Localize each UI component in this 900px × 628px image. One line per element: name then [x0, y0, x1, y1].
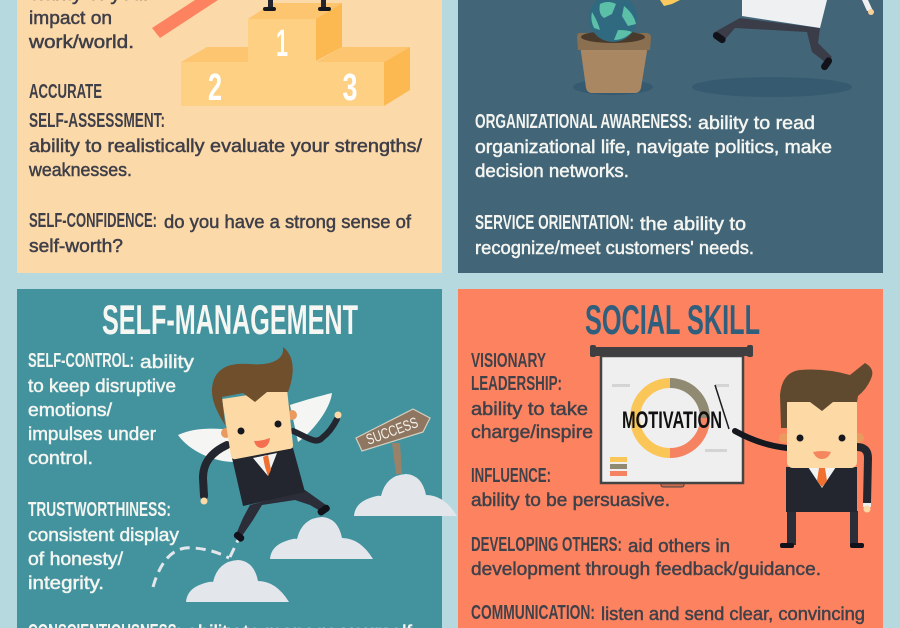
text: self-management items: integrity. — [28, 572, 104, 593]
text: self-awareness items: ability to realistically evaluate your strengths/ — [29, 135, 423, 156]
text: self-awareness items: work/world. — [28, 31, 134, 52]
text: social awareness items: decision networks. — [475, 160, 629, 181]
icon: presenting businessman — [715, 363, 872, 548]
icon: potted globe — [573, 0, 653, 95]
heading: social skill: SOCIAL SKILL — [585, 296, 760, 343]
text: social awareness items: recognize/meet customers' needs. — [475, 237, 754, 258]
text: self-awareness items: impact on — [29, 7, 112, 28]
text: self-management items: control. — [28, 447, 93, 468]
icon: dashed jump path — [153, 540, 238, 587]
chart: motivation donut — [635, 383, 705, 453]
icon: clouds — [186, 474, 457, 602]
text: social skill items: DEVELOPING OTHERS: — [471, 533, 622, 556]
panel: social awareness — [458, 0, 883, 273]
text: social awareness items: SERVICE ORIENTATION: — [475, 211, 634, 234]
chart labels — [612, 384, 729, 452]
text: self-management items: consistent display — [28, 524, 180, 545]
chart legend — [610, 457, 627, 476]
icon: character shadow — [692, 77, 852, 97]
icon: success signpost: SUCCESS — [364, 414, 420, 449]
text: social awareness items: the ability to — [640, 213, 746, 234]
text: self-management items: SELF-CONTROL: — [28, 349, 134, 372]
text: social skill items: VISIONARY — [471, 349, 546, 372]
text: self-awareness items: SELF-ASSESSMENT: — [29, 109, 165, 132]
text: self-awareness items: SELF-CONFIDENCE: — [29, 209, 157, 232]
text: social awareness items: ability to read — [698, 112, 815, 133]
text: self-management items — [28, 349, 413, 628]
icon: salmon arrow — [152, 0, 218, 38]
panel background: social awareness — [458, 0, 883, 273]
panel: self-management — [17, 289, 457, 628]
panel background: self-awareness — [17, 0, 442, 273]
icon: success signpost — [356, 409, 430, 474]
text: self-management items: of honesty/ — [28, 548, 124, 569]
text: social skill items: charge/inspire — [471, 421, 593, 442]
text: self-awareness items: weaknesses. — [28, 159, 132, 180]
text: self-awareness items: ACCURATE — [29, 80, 102, 103]
icon: running businessman — [712, 0, 874, 71]
text: self-management items: emotions/ — [28, 399, 113, 420]
text: social awareness items — [475, 110, 832, 258]
heading: self-management: SELF-MANAGEMENT — [102, 296, 358, 343]
icon: flying businessman with wings — [178, 347, 342, 543]
icon: winners podium: 2 — [208, 67, 222, 109]
panel: self-awareness — [17, 0, 442, 273]
text: social skill items: COMMUNICATION: — [471, 601, 595, 624]
panel background: self-management — [17, 289, 442, 628]
text: social skill items: INFLUENCE: — [471, 464, 551, 487]
text: self-awareness items — [28, 0, 423, 256]
text: social skill items: ability to take — [471, 398, 588, 419]
text: social skill items: LEADERSHIP: — [471, 372, 562, 395]
icon: winners podium — [181, 0, 410, 109]
text: self-awareness items: do you have a strong sense of — [164, 211, 412, 232]
text: self-management items: TRUSTWORTHINESS: — [28, 498, 171, 521]
text: self-awareness items: self-worth? — [29, 235, 123, 256]
text: self-management items: to keep disruptive — [28, 375, 176, 396]
panel background: social skill — [458, 289, 883, 628]
icon: winners podium: 1 — [276, 23, 288, 65]
text: social skill items — [471, 349, 865, 624]
text: social awareness items: organizational life, navigate politics, make — [475, 136, 832, 157]
text: social skill items: development through feedback/guidance. — [471, 558, 821, 579]
text: social skill items: aid others in — [628, 535, 730, 556]
panel: social skill — [458, 289, 883, 628]
icon: winners podium: 3 — [342, 67, 358, 109]
icon: projector screen — [590, 345, 753, 487]
text: social skill items: ability to be persuasive. — [471, 489, 670, 510]
text: social skill items: listen and send clear, convincing — [601, 603, 865, 624]
text: self-management items: ability — [140, 351, 195, 372]
icon: yellow object — [660, 0, 680, 6]
text: self-management items: impulses under — [28, 423, 156, 444]
text: social awareness items: ORGANIZATIONAL AWARENESS: — [475, 110, 692, 133]
label: motivation: MOTIVATION — [622, 407, 722, 434]
